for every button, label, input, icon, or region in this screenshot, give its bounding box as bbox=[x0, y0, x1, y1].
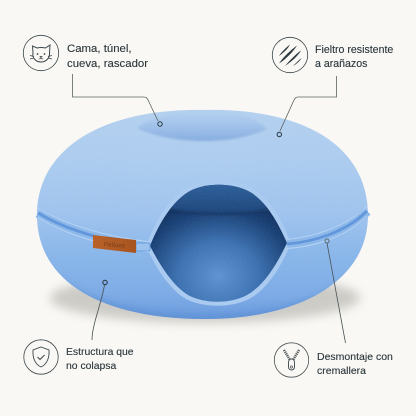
shaded lower edge and top hole bbox=[68, 118, 319, 319]
felt texture bbox=[151, 185, 285, 300]
leader line bbox=[92, 285, 104, 340]
callout: fieltro resistente a arañazos bbox=[272, 37, 393, 137]
label: Cama, túnel, bbox=[67, 43, 132, 55]
donut body bbox=[37, 110, 368, 319]
label: cueva, rascador bbox=[67, 58, 148, 70]
callout: desmontaje con cremallera bbox=[274, 239, 393, 377]
cave opening bbox=[150, 185, 287, 302]
leader line bbox=[280, 76, 336, 131]
leather brand tag: Pelluxe bbox=[104, 241, 126, 250]
cave opening rim bbox=[146, 180, 291, 306]
leader line bbox=[327, 243, 346, 343]
leader line bbox=[72, 74, 158, 121]
label: Fieltro resistente bbox=[315, 44, 393, 56]
callout: cama, túnel, cueva, rascador bbox=[23, 35, 162, 126]
label: a arañazos bbox=[315, 58, 367, 70]
label: no colapsa bbox=[66, 361, 116, 372]
label: cremallera bbox=[317, 365, 366, 377]
zipper pull bbox=[136, 243, 150, 251]
floor shadow bbox=[50, 273, 360, 323]
zipper left bbox=[38, 208, 150, 252]
label: Estructura que bbox=[66, 347, 134, 358]
label: Desmontaje con bbox=[317, 351, 393, 363]
icon: shield bbox=[24, 340, 58, 374]
icon: zipper bbox=[274, 343, 309, 377]
leather brand tag bbox=[93, 235, 136, 253]
product: blue felt donut cat bed bbox=[36, 110, 370, 328]
callout: estructura que no colapsa bbox=[24, 280, 134, 374]
cave roof bbox=[169, 184, 270, 216]
icon: cat bbox=[23, 35, 59, 71]
zipper right bbox=[287, 206, 367, 248]
icon: scratches bbox=[272, 37, 308, 73]
